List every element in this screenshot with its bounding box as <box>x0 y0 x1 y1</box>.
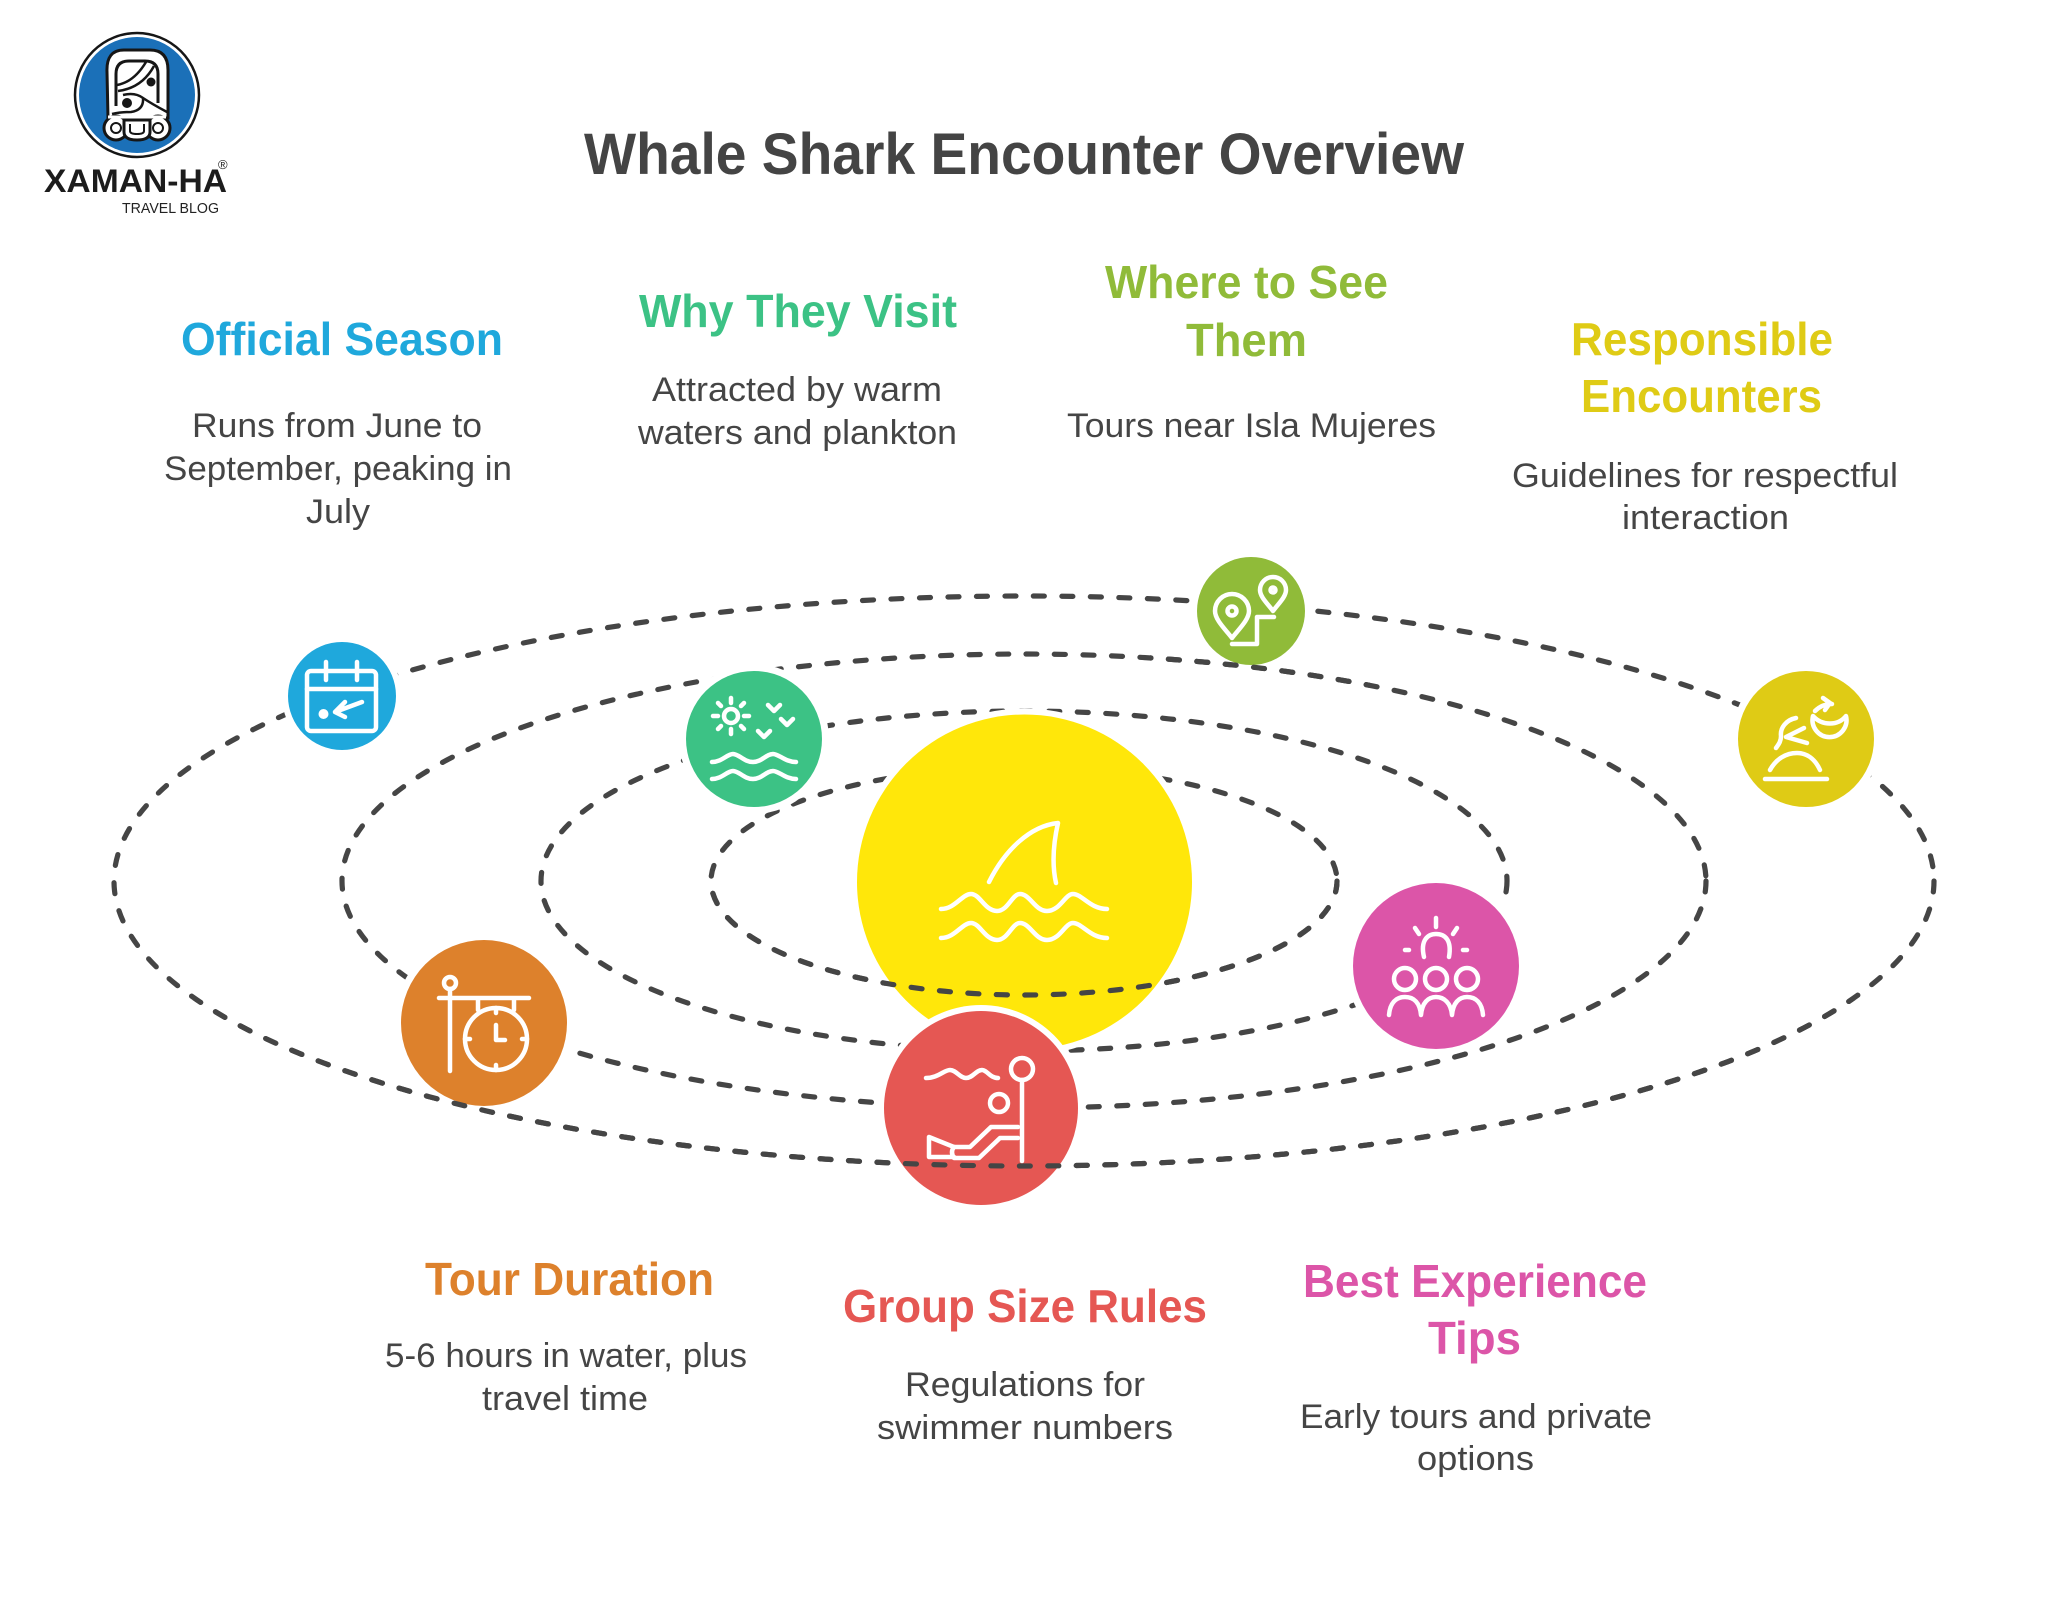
label: where to see them: Them <box>1186 314 1307 366</box>
logo: Xaman-Ha Travel Blog: TRAVEL BLOG <box>122 200 219 217</box>
label: responsible encounters: interaction <box>1622 499 1789 537</box>
label: responsible encounters: Guidelines for respectful <box>1512 457 1898 495</box>
label: official season: July <box>306 493 370 531</box>
label: tour duration: 5-6 hours in water, plus <box>385 1337 747 1375</box>
label: why they visit: Why They Visit <box>639 285 957 337</box>
icon: sun, birds and waves, why they visit <box>679 664 829 814</box>
label: where to see them: Where to See <box>1105 256 1388 308</box>
label: official season: September, peaking in <box>164 450 512 488</box>
label: group size rules: Group Size Rules <box>843 1280 1207 1332</box>
label: best experience tips: options <box>1417 1440 1534 1478</box>
label: tour duration <box>385 1253 747 1418</box>
orbit rings <box>114 596 1934 1166</box>
logo: Xaman-Ha Travel Blog <box>44 33 228 217</box>
icon: person and globe, responsible encounters <box>1731 664 1881 814</box>
label: best experience tips: Best Experience <box>1303 1255 1647 1307</box>
central circle: whale shark fin icon <box>857 714 1192 1050</box>
label: official season: Runs from June to <box>192 407 482 445</box>
icon: people and leader, best experience tips <box>1346 876 1526 1056</box>
icon: calendar, official season <box>282 636 402 756</box>
label: best experience tips <box>1300 1255 1652 1478</box>
label: responsible encounters: Encounters <box>1581 370 1822 422</box>
label: tour duration: Tour Duration <box>425 1253 714 1305</box>
label: tour duration: travel time <box>482 1380 648 1418</box>
icon: hanging clock, tour duration <box>394 933 574 1113</box>
label: group size rules: swimmer numbers <box>877 1409 1173 1447</box>
icon: snorkeler, group size rules <box>878 1005 1084 1211</box>
label: official season <box>164 313 512 531</box>
label: where to see them: Tours near Isla Mujeres <box>1067 407 1436 445</box>
icon: map pins, where to see them <box>1191 551 1311 671</box>
label: why they visit: waters and plankton <box>637 414 957 452</box>
label: group size rules: Regulations for <box>905 1366 1145 1404</box>
label: why they visit: Attracted by warm <box>652 371 942 409</box>
label: responsible encounters <box>1512 313 1898 537</box>
label: why they visit <box>637 285 957 452</box>
title: Whale Shark Encounter Overview <box>584 122 1465 187</box>
inner ring front arc <box>710 884 1340 998</box>
label: where to see them <box>1067 256 1436 445</box>
label: best experience tips: Early tours and private <box>1300 1398 1652 1436</box>
label: best experience tips: Tips <box>1428 1312 1521 1364</box>
label: group size rules <box>843 1280 1207 1447</box>
logo: Xaman-Ha Travel Blog: XAMAN-HA <box>44 163 227 199</box>
label: official season: Official Season <box>181 313 503 365</box>
logo: Xaman-Ha Travel Blog: ® <box>218 157 228 172</box>
label: responsible encounters: Responsible <box>1571 313 1833 365</box>
outer and second ring front arcs <box>192 655 1856 1169</box>
